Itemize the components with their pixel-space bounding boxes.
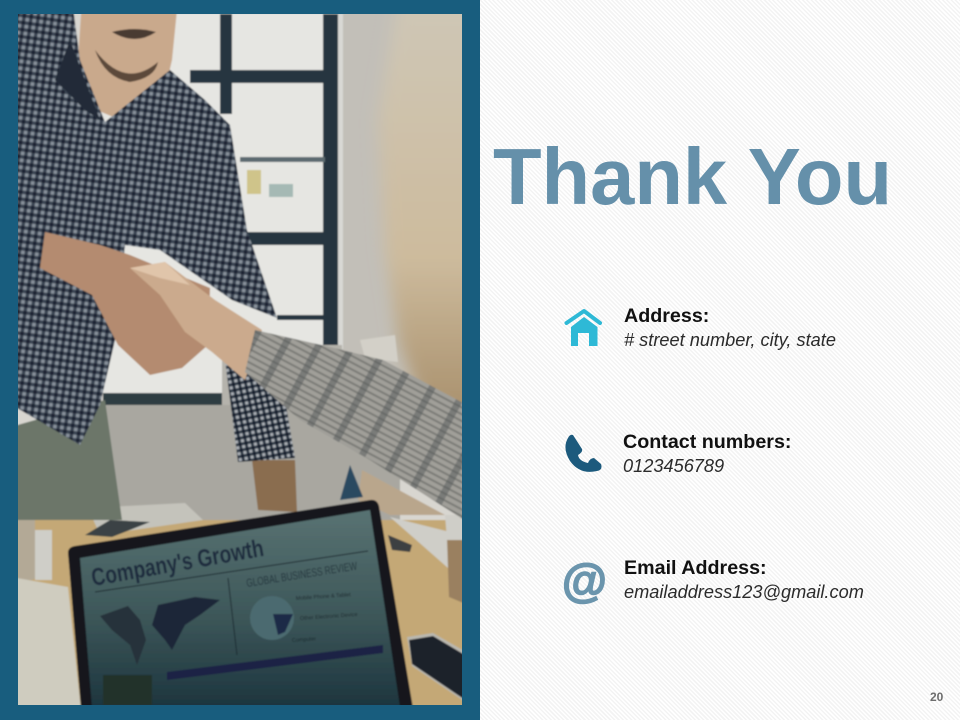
laptop showing Company's Growth — [68, 500, 415, 720]
email address block: emailaddress123@gmail.com — [624, 582, 864, 602]
laptop showing Company's Growth: Company's Growth — [89, 534, 266, 591]
panel: photo of handshake in blue frame — [0, 0, 480, 720]
contact numbers block: Contact numbers: — [623, 431, 791, 453]
table and desk items — [0, 465, 480, 720]
icon: house — [564, 309, 602, 346]
man: trousers, face and shirt — [0, 0, 297, 520]
email address block: Email Address: — [624, 557, 767, 579]
address block — [624, 305, 836, 350]
address block: Address: — [624, 305, 709, 327]
title: Thank You — [493, 132, 892, 221]
page number: 20 — [930, 690, 943, 704]
contact numbers block — [623, 431, 791, 476]
laptop showing Company's Growth: GLOBAL BUSINESS REVIEW — [246, 560, 359, 590]
email address block — [624, 557, 864, 602]
contact numbers block: 0123456789 — [623, 456, 724, 476]
address block: # street number, city, state — [624, 330, 836, 350]
handshake and arms — [40, 232, 480, 530]
laptop showing Company's Growth: Computer — [292, 636, 316, 644]
laptop showing Company's Growth: Other Electronic Device — [300, 612, 358, 622]
icon: at sign: @ — [562, 554, 607, 606]
window and wall background — [0, 0, 480, 720]
icon: telephone — [565, 434, 602, 472]
laptop showing Company's Growth: Mobile Phone & Tablet — [296, 592, 351, 602]
